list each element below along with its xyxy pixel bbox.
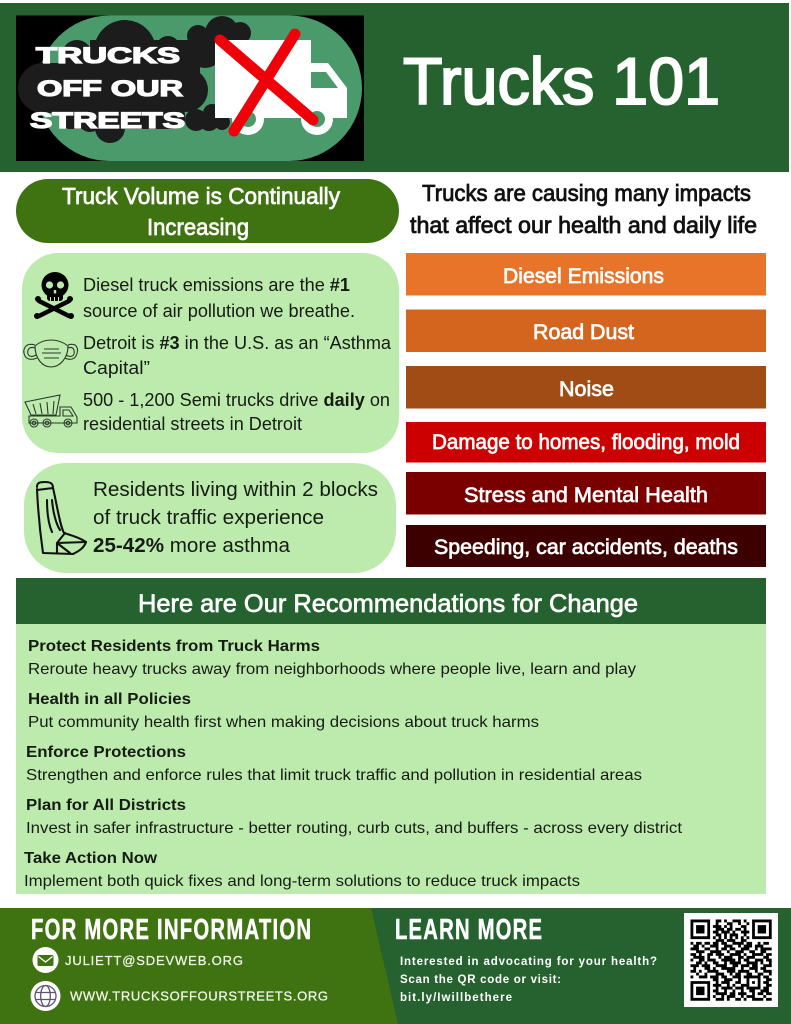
text: diesel emissions: Diesel truck emissions are the #1 — [83, 275, 350, 295]
impact bars — [406, 253, 766, 567]
learn more text: bit.ly/Iwillbethere — [400, 992, 512, 1004]
recommendations heading: Here are Our Recommendations for Change — [138, 590, 638, 618]
icon: face mask — [24, 340, 77, 367]
text: semi trucks: residential streets in Detroit — [83, 414, 302, 434]
pill heading: truck volume: Truck Volume is Continually — [62, 183, 340, 209]
learn more text: Interested in advocating for your health? — [400, 956, 657, 968]
learn more text: Scan the QR code or visit: — [400, 974, 561, 986]
bar: noise: Noise — [559, 378, 614, 401]
header banner — [0, 3, 789, 172]
recommendation: plan for all districts: Invest in safer infrastructure - better routing, curb cuts, and buffers - across every district — [26, 820, 683, 837]
icon: dump truck — [25, 395, 77, 427]
panel: recommendations — [16, 578, 766, 894]
pill heading: truck volume: Increasing — [147, 214, 249, 240]
icon: inhaler — [37, 482, 86, 554]
bar: road dust — [406, 310, 766, 352]
recommendation: health in all policies: Put community health first when making decisions about truck harms — [28, 714, 539, 731]
panel: truck facts — [22, 253, 399, 453]
learn more text — [400, 956, 657, 1004]
icon: red X — [220, 34, 313, 131]
recommendation: take action now: Implement both quick fixes and long-term solutions to reduce truck impacts — [24, 873, 580, 890]
text: diesel emissions — [83, 275, 355, 321]
text: asthma capital: Capital” — [83, 358, 150, 378]
impacts heading: that affect our health and daily life — [410, 212, 757, 238]
text: asthma stat: 25-42% more asthma — [93, 535, 291, 557]
recommendation: protect residents: Protect Residents from Truck Harms — [28, 638, 320, 655]
bar: diesel emissions — [406, 253, 766, 296]
recommendation: plan for all districts: Plan for All Districts — [26, 797, 186, 814]
recommendation: health in all policies — [28, 691, 539, 731]
icon: email — [32, 947, 58, 973]
pill heading: truck volume — [16, 179, 399, 243]
bar: road dust: Road Dust — [533, 321, 634, 344]
logo: trucks off our streets — [16, 16, 364, 161]
bar: speeding: Speeding, car accidents, deaths — [434, 536, 738, 559]
email address: JULIETT@SDEVWEB.ORG — [65, 953, 243, 968]
text: semi trucks: 500 - 1,200 Semi trucks drive daily on — [83, 390, 390, 410]
icon: skull and crossbones — [34, 272, 74, 319]
bar: speeding — [406, 525, 766, 567]
recommendation: enforce protections — [26, 744, 642, 784]
text: asthma capital — [83, 333, 392, 378]
recommendation: health in all policies: Health in all Policies — [28, 691, 191, 708]
text: asthma stat: Residents living within 2 blocks — [93, 479, 378, 501]
title: Trucks 101 — [403, 44, 720, 118]
bar: damage — [406, 422, 766, 462]
contact heading: FOR MORE INFORMATION — [31, 914, 311, 946]
impacts heading — [410, 180, 757, 238]
recommendation: enforce protections: Enforce Protections — [26, 744, 186, 761]
bar: diesel emissions: Diesel Emissions — [503, 265, 664, 288]
bar: damage: Damage to homes, flooding, mold — [432, 431, 740, 454]
recommendation: take action now: Take Action Now — [24, 850, 158, 867]
recommendation: enforce protections: Strengthen and enforce rules that limit truck traffic and pollution in residential areas — [26, 767, 642, 784]
bar: stress — [406, 472, 766, 514]
icon: globe — [30, 981, 60, 1011]
QR code — [684, 913, 778, 1007]
icon: truck — [215, 40, 347, 135]
logo wordmark: OFF OUR — [37, 76, 183, 101]
recommendation: protect residents: Reroute heavy trucks away from neighborhoods where people live, learn and play — [28, 661, 636, 678]
text: diesel emissions: source of air pollution we breathe. — [83, 301, 355, 321]
text: asthma stat: of truck traffic experience — [93, 507, 324, 529]
logo wordmark: TRUCKS — [36, 43, 180, 68]
bar: stress: Stress and Mental Health — [464, 484, 708, 507]
recommendation: take action now — [24, 850, 580, 890]
smoke clouds — [18, 16, 251, 143]
logo wordmark — [30, 43, 185, 133]
text: asthma stat — [93, 479, 378, 557]
footer: learn more — [360, 908, 791, 1024]
recommendation: plan for all districts — [26, 797, 683, 837]
text: semi trucks — [83, 390, 390, 434]
logo wordmark: STREETS — [30, 108, 185, 133]
website address: WWW.TRUCKSOFFOURSTREETS.ORG — [70, 988, 328, 1004]
impacts heading: Trucks are causing many impacts — [422, 180, 751, 206]
text: asthma capital: Detroit is #3 in the U.S. as an “Asthma — [83, 333, 392, 353]
recommendation: protect residents — [28, 638, 636, 678]
panel: asthma stat — [24, 463, 396, 573]
learn more heading: LEARN MORE — [395, 914, 542, 946]
bar: noise — [406, 366, 766, 408]
footer: for more information — [0, 908, 398, 1024]
